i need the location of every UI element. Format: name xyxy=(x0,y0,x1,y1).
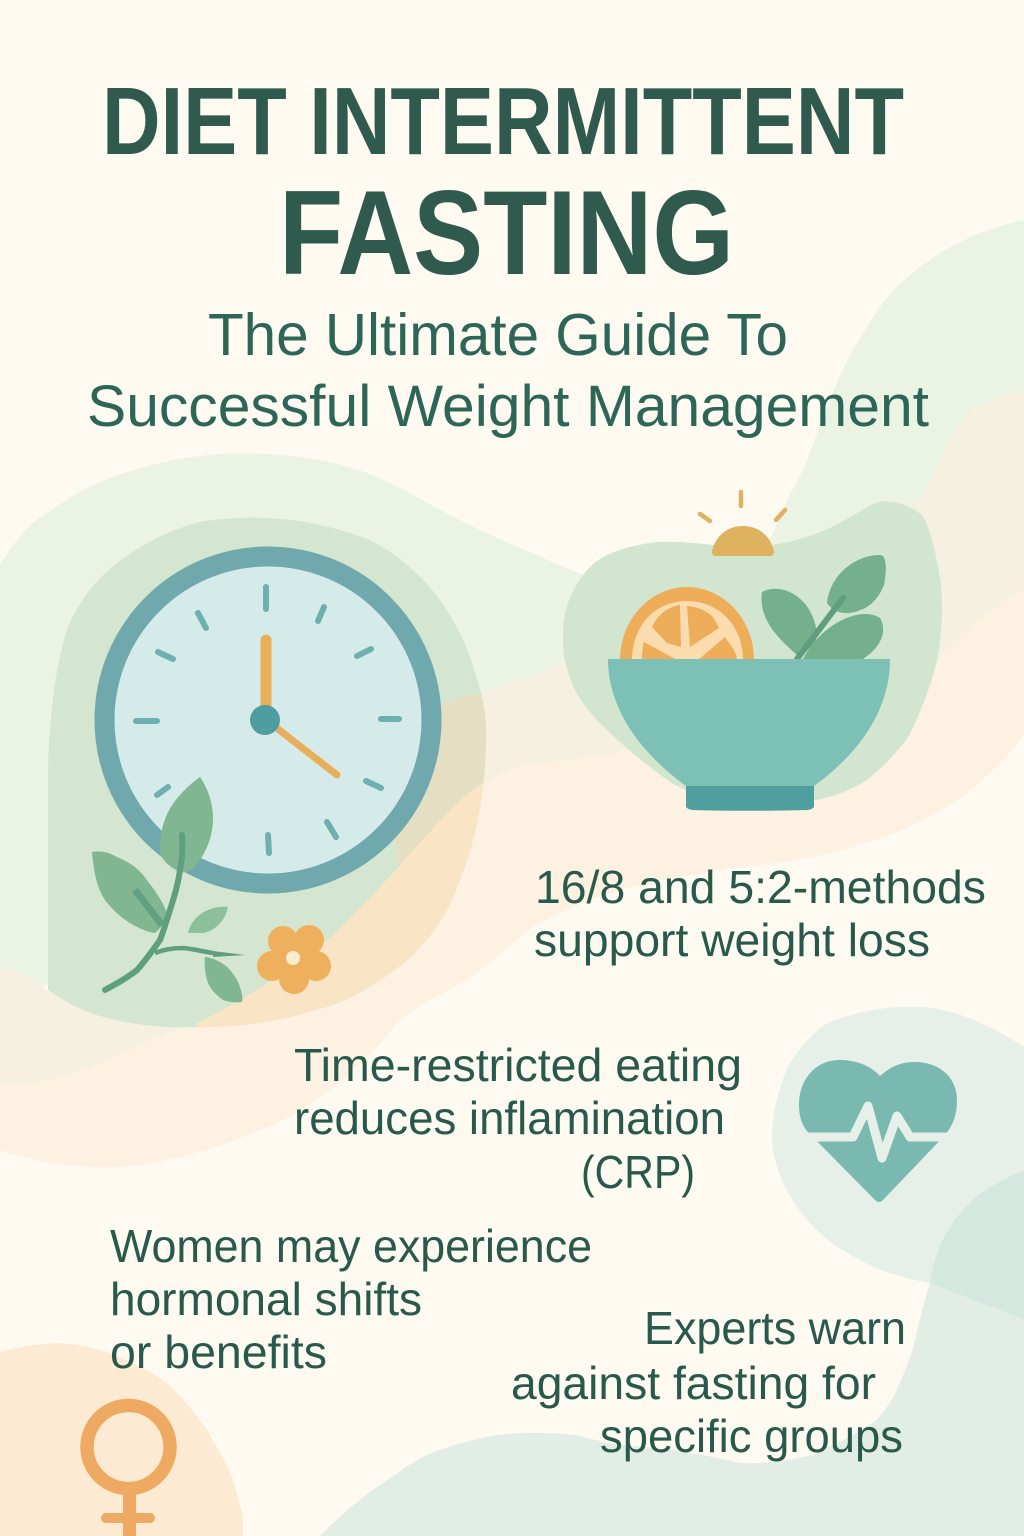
text: 16/8 methods xyxy=(534,861,986,966)
text: women: Women may experience xyxy=(110,1220,592,1272)
text: women: hormonal shifts xyxy=(110,1273,422,1325)
icon: sun xyxy=(700,492,785,556)
text: time-restricted eating: Time-restricted eating xyxy=(294,1039,742,1091)
text: experts warn: against fasting for xyxy=(511,1357,876,1409)
icon: leaves xyxy=(762,555,886,659)
subtitle: The Ultimate Guide To xyxy=(208,302,788,368)
text: time-restricted eating: (CRP) xyxy=(581,1146,695,1198)
bowl backdrop blob xyxy=(563,501,942,800)
title: DIET INTERMITTENT xyxy=(102,68,904,175)
icon: leaf sprig xyxy=(92,777,245,1002)
icon: clock xyxy=(104,556,432,884)
text: time-restricted eating: reduces inflamination xyxy=(294,1092,725,1144)
icon: orange slice xyxy=(620,587,754,660)
icon: flower xyxy=(257,925,331,994)
text: experts warn xyxy=(511,1302,906,1462)
text: women: or benefits xyxy=(110,1326,327,1378)
icon: female symbol xyxy=(87,1406,170,1536)
text: 16/8 methods: 16/8 and 5:2-methods xyxy=(535,861,986,913)
text: time-restricted eating xyxy=(294,1039,742,1198)
icon: heart with pulse xyxy=(799,1060,960,1202)
title xyxy=(102,68,904,300)
title: FASTING xyxy=(279,166,734,300)
clock backdrop blob xyxy=(48,518,486,1028)
text: 16/8 methods: support weight loss xyxy=(534,914,930,966)
text: experts warn: Experts warn xyxy=(644,1302,906,1354)
subtitle xyxy=(87,302,929,439)
subtitle: Successful Weight Management xyxy=(87,374,929,439)
text: women xyxy=(110,1220,592,1378)
text: experts warn: specific groups xyxy=(600,1410,903,1462)
icon: bowl xyxy=(608,659,890,811)
heart backdrop blob xyxy=(772,1007,1024,1320)
